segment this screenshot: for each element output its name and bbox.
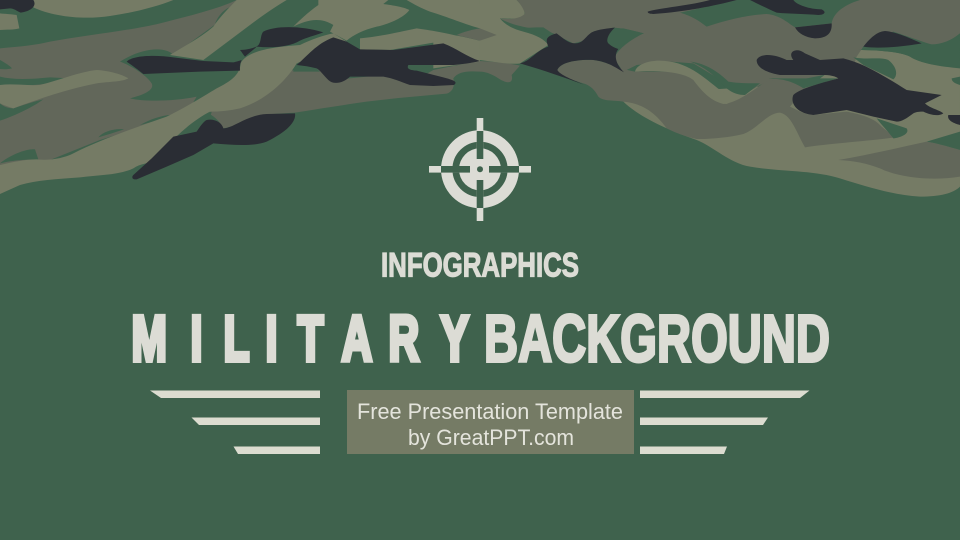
black patches (520, 0, 960, 125)
heading: infographics: INFOGRAPHICS (381, 246, 579, 284)
green patches (523, 0, 960, 150)
light olive stripe (635, 61, 745, 104)
dark olive patches (0, 0, 240, 165)
light olive patches (0, 0, 480, 194)
camouflage pattern: left half (0, 0, 520, 194)
dark olive wedge at seam (457, 28, 480, 41)
black patches (0, 0, 480, 179)
green stripes (0, 7, 433, 163)
title word: military: MILITARY (132, 304, 469, 375)
dark olive middle band (208, 61, 520, 128)
light olive base (480, 0, 960, 197)
camouflage pattern: right half (480, 0, 960, 197)
dark olive upper mass (500, 0, 960, 95)
subtitle line 1: Free Presentation Template (357, 399, 623, 424)
subtitle box (347, 390, 634, 454)
subtitle line 2: by GreatPPT.com (408, 425, 574, 450)
dark olive wedge bottom right (838, 142, 960, 179)
decorative wing: right (640, 390, 810, 454)
dark olive lower mass (557, 60, 895, 147)
decorative wing: left (150, 390, 320, 454)
title: military background (132, 302, 830, 376)
dark olive wedge at seam (480, 28, 497, 41)
icon: target crosshair (429, 118, 531, 221)
